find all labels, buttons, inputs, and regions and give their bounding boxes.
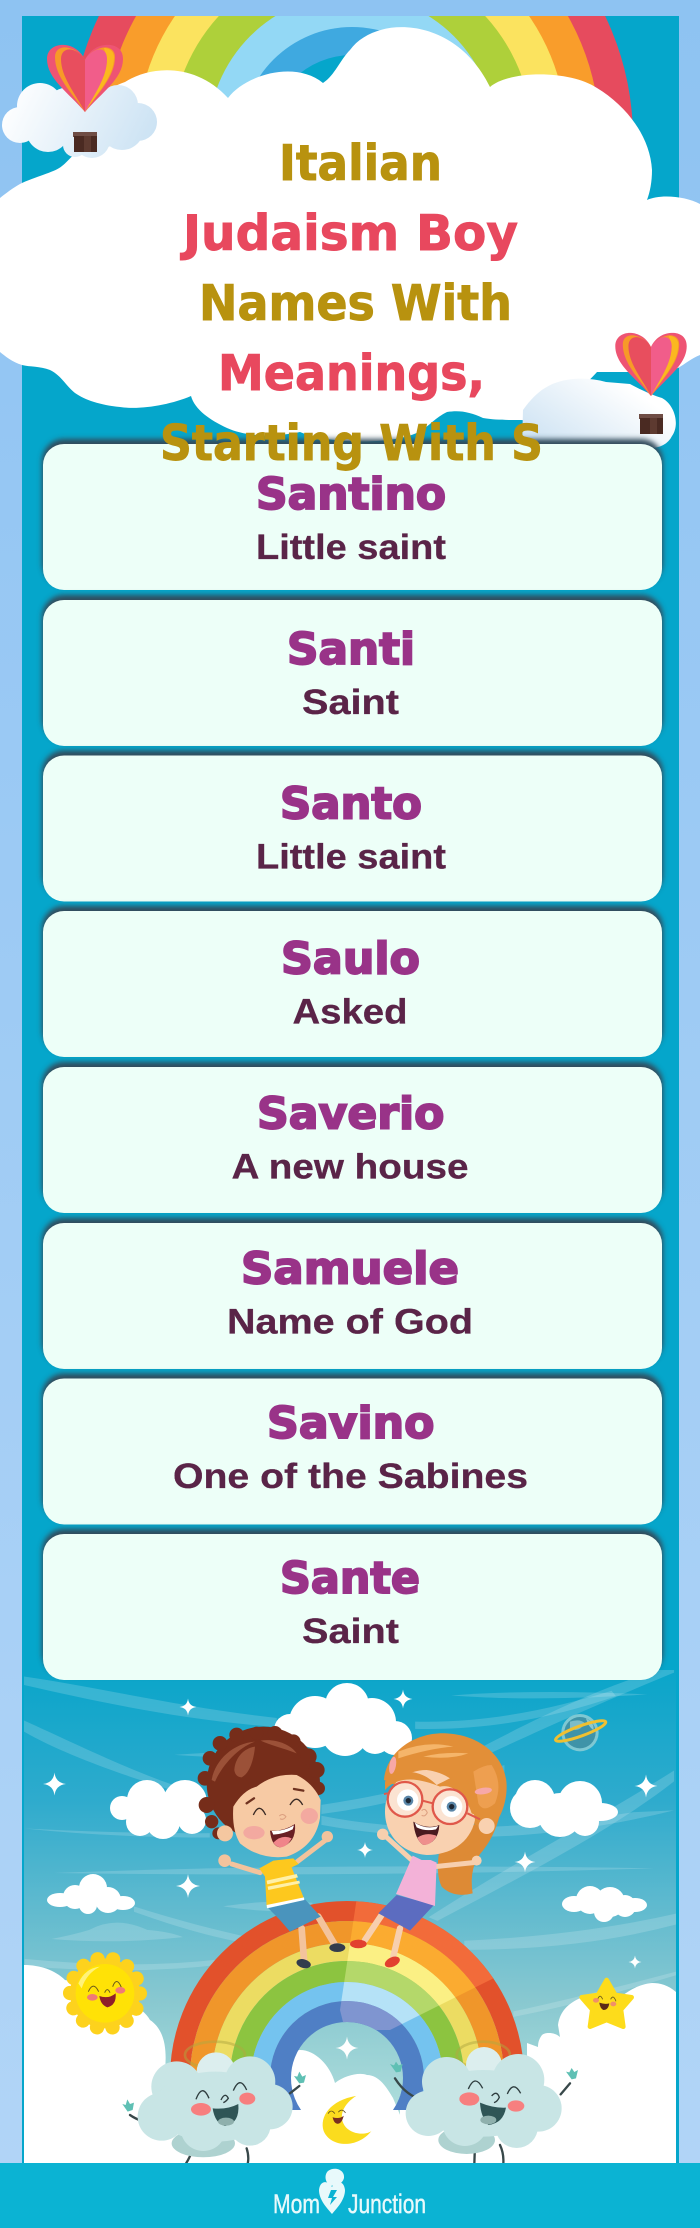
cloud top centre [274,1683,412,1756]
card: Santi [42,595,663,746]
card: Sante: Sante [280,1553,420,1604]
footer bar [0,2163,700,2228]
scene rainbow [170,1901,522,2110]
card: Santino: Santino [256,469,446,520]
card: Saverio: Saverio [257,1088,444,1139]
character: boy [198,1726,345,1970]
illustration: sky scene [24,1670,676,2163]
icon: balloon basket right [639,414,663,434]
logo: MomJunction [273,2169,426,2219]
white sky clouds [47,1683,647,1922]
white ground clouds [24,1965,300,2163]
boy hair [198,1726,325,1840]
card: Savino [42,1374,663,1524]
card: Santi: Santi [287,624,415,675]
title: Names With [199,275,512,332]
big white title cloud [0,27,700,442]
title: Starting With S [160,415,543,472]
card: Sante: Saint [302,1612,399,1651]
small cloud with balloon, left [2,45,157,158]
card: Saverio [42,1062,663,1213]
icon: ringed planet [554,1714,607,1751]
icon: balloon basket left [73,132,97,152]
title: Italian [279,135,442,192]
character: sun [70,1958,140,2028]
character: smiling cloud right [390,2042,578,2164]
card: Savino: Savino [267,1398,434,1449]
card: Santi: Saint [302,683,399,722]
girl hair [384,1733,507,1830]
small cloud with balloon, right [522,333,687,448]
card: Santo [42,750,663,902]
title [160,135,543,472]
card: Saulo: Saulo [281,934,420,984]
card: Saulo: Asked [292,992,408,1032]
character: girl [350,1733,507,1970]
card: Santino [42,439,663,590]
card: Santino: Little saint [256,528,446,567]
title: Meanings, [218,345,485,402]
card: Samuele: Samuele [241,1243,459,1294]
panel: name cards [42,439,663,1680]
card: Santo: Little saint [256,838,446,877]
card: Samuele: Name of God [227,1302,473,1341]
title: Judaism Boy [180,205,518,262]
logo: MomJunction: Junction [348,2189,426,2219]
icon: heart balloon left [47,45,123,112]
character: happy star [582,1980,632,2027]
sparkles [43,1690,658,2060]
character: smiling cloud left [122,2042,306,2164]
card: Sante [42,1529,663,1680]
card: Saverio: A new house [232,1147,468,1186]
sky streaks [22,1665,676,2017]
card: Saulo [42,906,663,1057]
top rainbow [72,16,632,157]
lighter sunlit part of rainbow [340,1901,494,2030]
character: crescent moon [323,2096,371,2144]
card: Savino: One of the Sabines [173,1457,528,1496]
cloud left middle [110,1780,207,1839]
cloud small left [47,1874,135,1914]
cloud right middle [510,1780,618,1837]
icon: heart balloon right [615,333,687,396]
sky background [24,1681,676,2115]
card: Samuele [42,1218,663,1369]
card: Santo: Santo [280,779,422,830]
cloud small right [562,1886,647,1922]
logo: MomJunction: Mom [273,2189,320,2219]
